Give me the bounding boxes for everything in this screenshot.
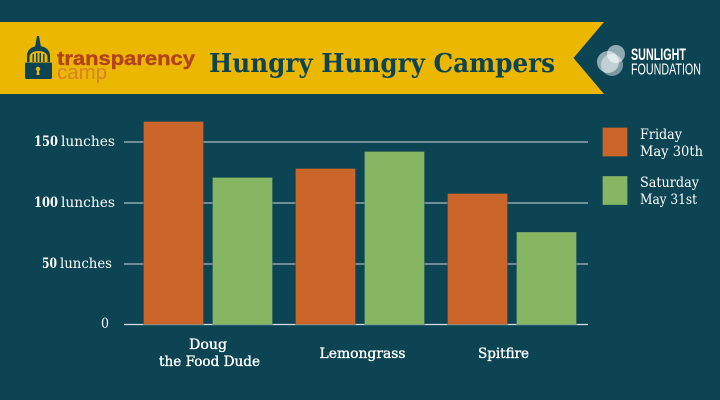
legend item: Friday [602,127,703,160]
legend item: Friday: May 30th [640,144,703,160]
y axis labels: 0 [101,316,109,332]
legend item: Saturday: May 31st [640,192,698,208]
icon: sunlight foundation circles [597,45,625,76]
x axis labels: Spitfire [478,346,529,362]
header banner [0,22,604,94]
x axis labels [159,337,529,370]
x axis labels: Doug [189,337,227,353]
logo wordmark: transparency camp: camp [57,62,107,84]
y axis labels: lunches [61,134,115,150]
legend item: Friday: Friday [640,127,682,143]
legend item: Saturday [602,175,699,208]
x axis labels: Lemongrass [320,346,406,362]
y axis labels: 50 [42,256,57,272]
bars: Lemongrass [296,152,424,324]
y axis labels: 150 [34,134,58,150]
y axis labels: 100 [34,195,58,211]
legend item: Saturday: Saturday [640,175,699,191]
legend [602,127,703,208]
bars: Spitfire [448,194,576,324]
sunlight foundation wordmark: SUNLIGHT [631,46,686,64]
bars: Doug the Food Dude [144,122,272,324]
y axis labels: lunches [61,195,115,211]
icon: capitol dome padlock [25,36,52,79]
logo wordmark: transparency camp [57,48,195,84]
y axis labels [34,134,115,332]
y axis labels: lunches [60,256,112,272]
sunlight foundation wordmark [631,46,701,78]
x axis labels: the Food Dude [159,354,260,370]
y axis gridlines [124,142,588,324]
bar chart [34,122,588,370]
title: Hungry Hungry Campers [209,49,555,79]
logo wordmark: transparency camp: transparency [57,48,195,70]
